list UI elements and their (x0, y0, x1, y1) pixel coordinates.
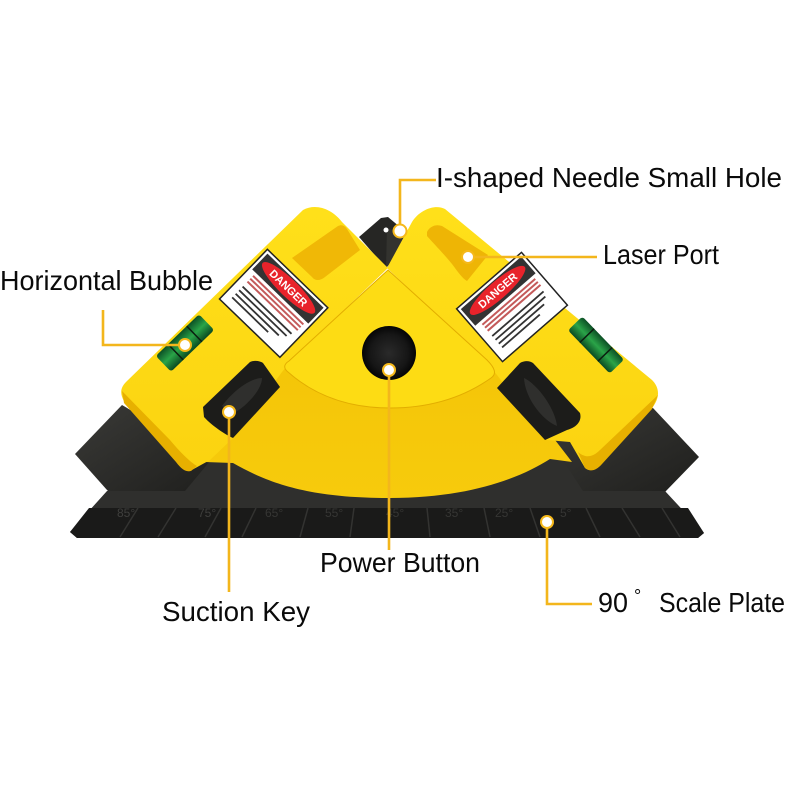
left arm (121, 207, 388, 471)
callout: 90° Scale Plate: 90 (598, 587, 628, 618)
needle tab (359, 217, 413, 268)
callout: Horizontal Bubble: Horizontal Bubble (0, 265, 213, 296)
scale plate: 45° (386, 506, 404, 520)
left danger label: DANGER (267, 268, 309, 310)
scale plate (70, 405, 704, 538)
scale plate: 35° (445, 506, 463, 520)
right arm front edge (578, 395, 658, 470)
right wing of plate (540, 408, 699, 493)
lower sector (205, 300, 572, 498)
scale plate: 5° (560, 506, 572, 520)
callout: 90° Scale Plate: Scale Plate (659, 587, 785, 618)
scale plate: 55° (325, 506, 343, 520)
callout: Power Button: Power Button (320, 547, 480, 578)
callout: I-shaped Needle Small Hole: I-shaped Needle Small Hole (436, 162, 782, 193)
right arm (387, 207, 658, 470)
callout: Horizontal Bubble (0, 265, 213, 351)
callout: Laser Port (462, 239, 719, 270)
callout: Suction Key: Suction Key (162, 596, 310, 627)
lower ruler bar (70, 440, 704, 538)
upper sector (285, 270, 494, 408)
callout: Laser Port: Laser Port (603, 239, 719, 270)
right laser port (427, 225, 488, 281)
callout: Power Button (320, 364, 480, 578)
left bubble vial (156, 314, 214, 372)
scale plate: 75° (198, 506, 216, 520)
scale plate: 65° (265, 506, 283, 520)
left arm front edge (122, 391, 197, 471)
scale plate: 85° (117, 506, 135, 520)
callout: 90° Scale Plate (541, 516, 785, 618)
scale plate: 25° (495, 506, 513, 520)
right bubble vial (568, 316, 624, 374)
left laser port (292, 225, 360, 280)
callout: I-shaped Needle Small Hole (394, 162, 782, 238)
power button (362, 326, 416, 380)
right suction key (497, 361, 580, 440)
callout: 90° Scale Plate: ° (634, 586, 641, 606)
left danger label (219, 249, 328, 357)
left suction key (203, 361, 280, 438)
right danger label: DANGER (476, 271, 520, 311)
right danger label (457, 252, 567, 362)
callout: Suction Key (162, 406, 310, 627)
left wing of plate (75, 405, 215, 493)
laser body (121, 207, 658, 498)
